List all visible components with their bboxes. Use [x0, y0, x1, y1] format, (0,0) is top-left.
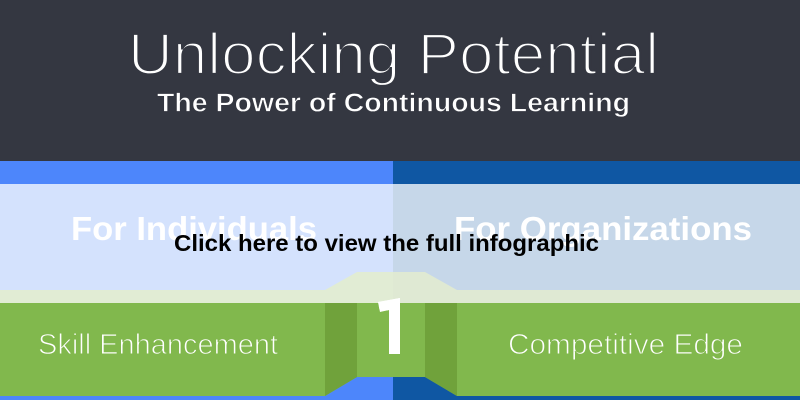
label: Competitive Edge: Competitive Edge [508, 329, 743, 361]
number 1: 1 [365, 284, 419, 373]
green ribbon [0, 303, 800, 396]
pale green band right [393, 272, 800, 303]
panel: organizations column [393, 161, 800, 400]
link text overlay: Click here to view the full infographic [174, 230, 599, 256]
ribbon fold left [325, 303, 357, 396]
panel: individuals column [0, 161, 393, 400]
header background [0, 0, 800, 161]
heading: For Individuals: For Individuals [71, 210, 317, 247]
title: Unlocking Potential [128, 22, 659, 87]
pale green band [0, 272, 393, 303]
heading: For Organizations: For Organizations [454, 210, 752, 247]
subtitle: The Power of Continuous Learning [157, 90, 630, 118]
label: Skill Enhancement: Skill Enhancement [38, 329, 278, 361]
ribbon fold right [425, 303, 457, 396]
